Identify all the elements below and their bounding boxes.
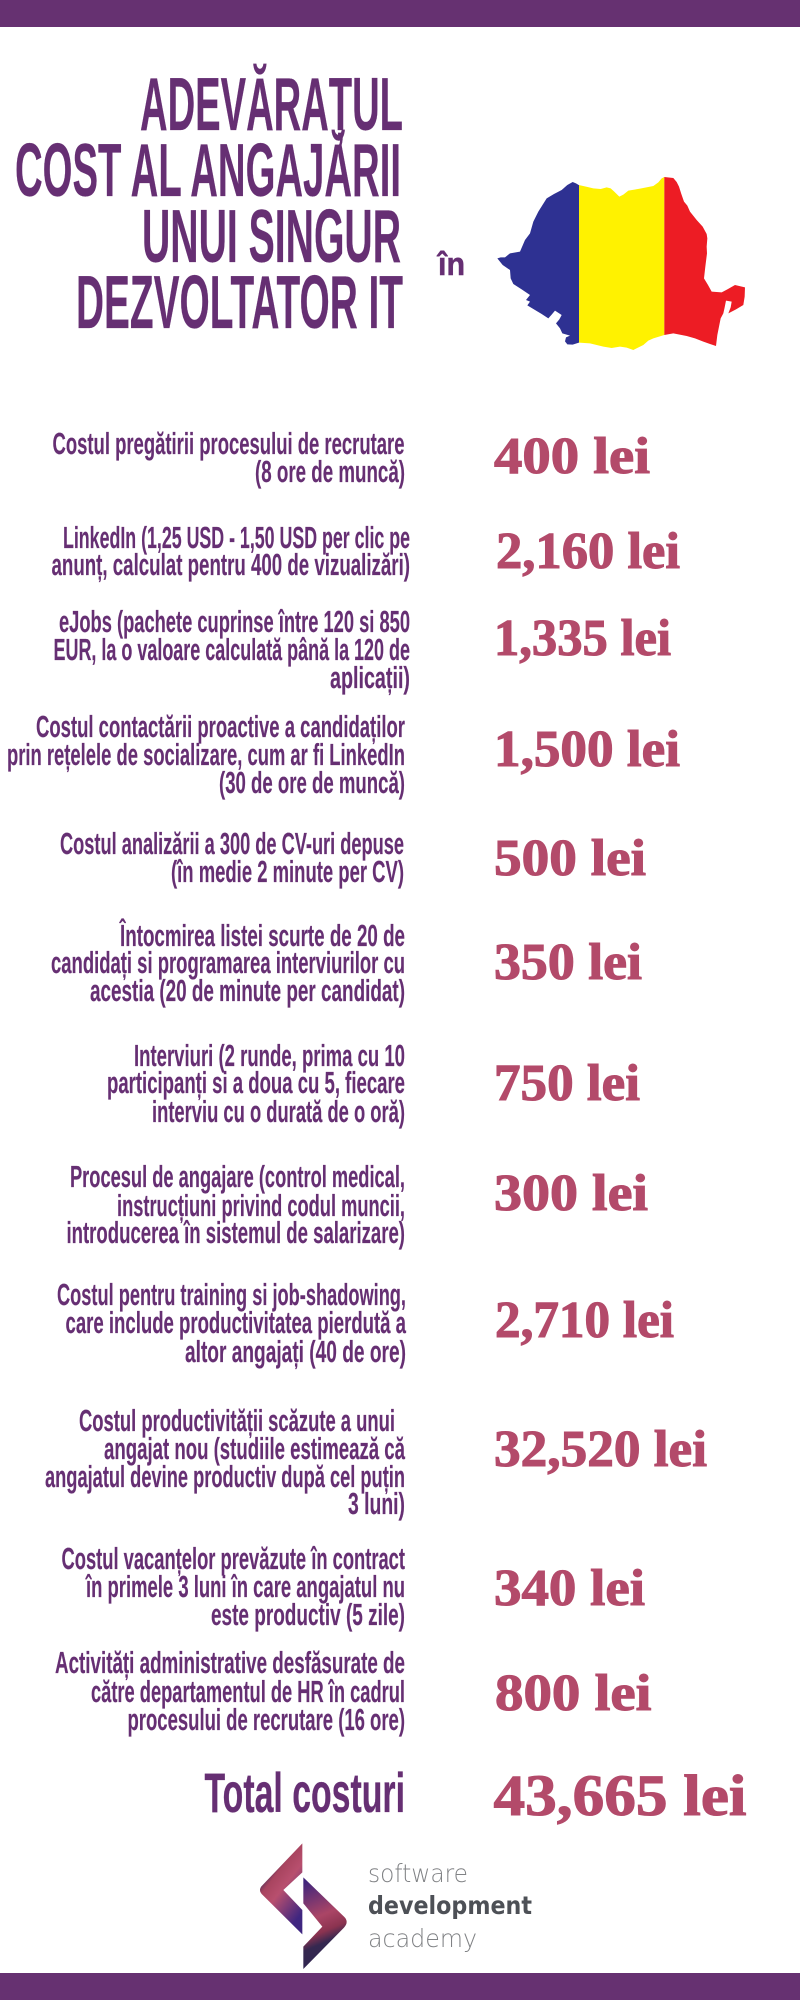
row 12 description: Activități administrative desfăsurate de xyxy=(55,1645,405,1680)
row 2 description: anunț, calculat pentru 400 de vizualizări) xyxy=(52,547,410,582)
row 1 description: (8 ore de muncă) xyxy=(255,454,405,489)
row 11 description: este productiv (5 zile) xyxy=(211,1597,405,1632)
top bar xyxy=(0,0,800,27)
row 3 value: 1,335 lei xyxy=(494,610,671,667)
row 5 description xyxy=(60,826,404,889)
row 7 description xyxy=(107,1038,405,1129)
bottom bar xyxy=(0,1973,800,2000)
row 12 description: către departamentul de HR în cadrul xyxy=(91,1674,405,1709)
row 4 description: (30 de ore de muncă) xyxy=(219,765,405,800)
row 12 description xyxy=(55,1645,405,1737)
row 4 description: prin rețelele de socializare, cum ar fi LinkedIn xyxy=(7,737,405,772)
row 10 description: Costul productivității scăzute a unui xyxy=(79,1403,395,1438)
row 3 description: eJobs (pachete cuprinse între 120 si 850 xyxy=(59,604,410,639)
title: DEZVOLTATOR IT xyxy=(76,260,403,344)
row 9 description: altor angajați (40 de ore) xyxy=(185,1334,406,1369)
row 1 description xyxy=(52,426,405,489)
row 7 description: Interviuri (2 runde, prima cu 10 xyxy=(134,1038,405,1073)
logo mark xyxy=(260,1843,347,1969)
row 3 description: aplicații) xyxy=(330,660,410,695)
title xyxy=(15,62,403,344)
row 11 value: 340 lei xyxy=(494,1560,645,1617)
row 7 description: interviu cu o durată de o oră) xyxy=(152,1094,405,1129)
row 1 value: 400 lei xyxy=(494,428,650,485)
row 10 description: angajatul devine productiv după cel puțin xyxy=(45,1459,405,1494)
row 11 description: în primele 3 luni în care angajatul nu xyxy=(85,1569,405,1604)
row 6 description: candidați si programarea interviurilor cu xyxy=(51,945,405,980)
title: UNUI SINGUR xyxy=(142,194,401,278)
row 12 description: procesului de recrutare (16 ore) xyxy=(128,1702,405,1737)
row 7 value: 750 lei xyxy=(494,1055,640,1112)
row 8 description: instrucțiuni privind codul muncii, xyxy=(117,1188,405,1223)
logo wordmark: academy xyxy=(368,1924,477,1953)
row 9 description: care include productivitatea pierdută a xyxy=(66,1305,406,1340)
row 3 description xyxy=(54,604,410,695)
row 8 description xyxy=(66,1159,405,1250)
row 8 value: 300 lei xyxy=(494,1165,648,1222)
row 6 description: acestia (20 de minute per candidat) xyxy=(90,973,405,1008)
row 6 description: Întocmirea listei scurte de 20 de xyxy=(119,917,405,953)
row 8 description: introducerea în sistemul de salarizare) xyxy=(66,1215,405,1250)
row 5 description: (în medie 2 minute per CV) xyxy=(171,854,404,889)
row 4 value: 1,500 lei xyxy=(494,721,680,778)
row 10 description: 3 luni) xyxy=(348,1486,405,1521)
row 3 description: EUR, la o valoare calculată până la 120 de xyxy=(54,632,410,667)
logo wordmark xyxy=(368,1859,532,1953)
row 6 value: 350 lei xyxy=(494,934,642,991)
row 4 description xyxy=(7,709,405,800)
row 1 description: Costul pregătirii procesului de recrutare xyxy=(52,426,404,461)
row 10 description: angajat nou (studiile estimează că xyxy=(104,1431,405,1466)
row 5 description: Costul analizării a 300 de CV-uri depuse xyxy=(60,826,404,861)
row 4 description: Costul contactării proactive a candidaților xyxy=(36,709,405,744)
row 10 description xyxy=(45,1403,405,1521)
logo wordmark: development xyxy=(368,1891,532,1920)
row 7 description: participanți si a doua cu 5, fiecare xyxy=(107,1065,405,1100)
row 9 description: Costul pentru training si job-shadowing, xyxy=(57,1277,406,1312)
title: COST AL ANGAJĂRII xyxy=(15,128,401,212)
total value: 43,665 lei xyxy=(494,1763,746,1828)
row 11 description xyxy=(62,1541,405,1632)
row 11 description: Costul vacanțelor prevăzute în contract xyxy=(62,1541,405,1576)
logo wordmark: software xyxy=(368,1859,468,1888)
row 2 value: 2,160 lei xyxy=(496,523,680,580)
total label: Total costuri xyxy=(204,1761,405,1824)
row 5 value: 500 lei xyxy=(494,830,646,887)
row 6 description xyxy=(51,917,405,1008)
row 2 description xyxy=(52,520,410,582)
word: în: în xyxy=(436,246,465,282)
map of Romania with flag colours xyxy=(498,177,745,350)
row 10 value: 32,520 lei xyxy=(494,1421,707,1478)
row 9 description xyxy=(57,1277,406,1369)
row 8 description: Procesul de angajare (control medical, xyxy=(70,1159,405,1194)
row 12 value: 800 lei xyxy=(495,1665,652,1722)
row 2 description: LinkedIn (1,25 USD - 1,50 USD per clic pe xyxy=(63,520,410,555)
title: ADEVĂRAȚUL xyxy=(140,62,403,147)
row 9 value: 2,710 lei xyxy=(495,1292,674,1349)
